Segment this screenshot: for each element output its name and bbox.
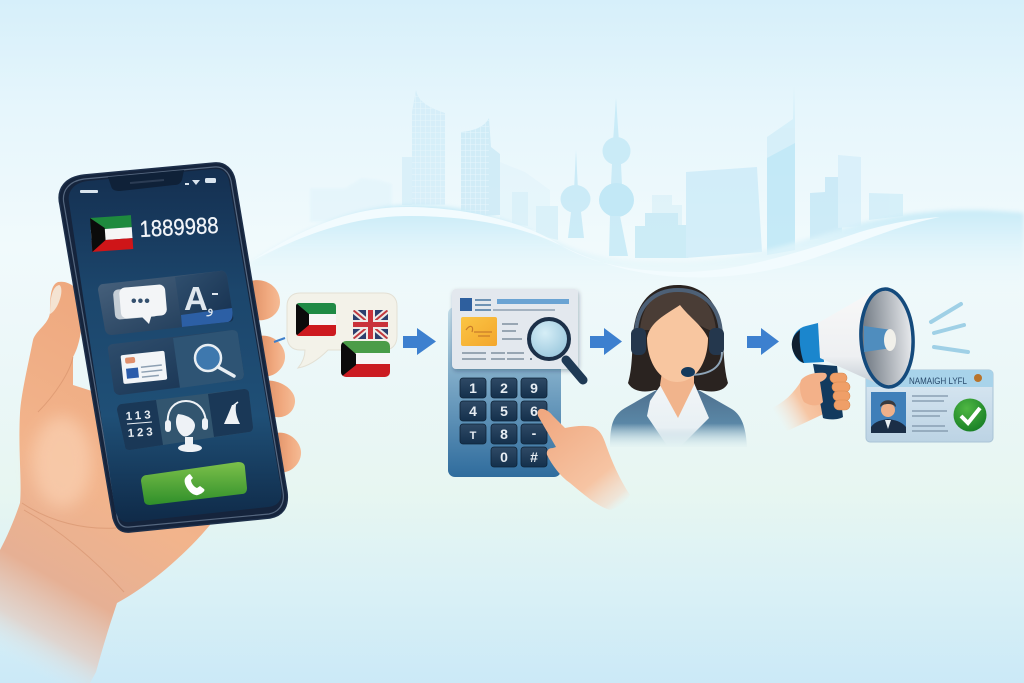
card heading: NAMAIGH LYFL <box>909 376 967 386</box>
skyline silhouette <box>310 87 903 258</box>
keypad keys: 6 <box>530 403 538 419</box>
flag: United Kingdom <box>353 310 388 339</box>
headset <box>636 290 721 335</box>
flag: Kuwait <box>296 303 336 336</box>
rim <box>858 288 916 388</box>
phone tile row 2 <box>108 330 244 395</box>
kuwait towers <box>560 98 634 256</box>
arrow 2 <box>590 328 622 355</box>
flag: Kuwait large <box>341 341 390 377</box>
phone tile row 3: 113 <box>125 409 151 423</box>
phone number: 1889988 <box>139 212 219 242</box>
mic stand icon <box>224 405 240 424</box>
keypad keys <box>460 378 547 467</box>
keypad keys: 4 <box>469 403 477 419</box>
keypad keys: 2 <box>500 380 508 396</box>
phone tile row 1 <box>98 271 233 335</box>
ID document card <box>452 289 578 369</box>
keypad keys: # <box>530 449 538 465</box>
magnifying glass <box>529 319 583 380</box>
keypad keys: 1 <box>469 380 477 396</box>
phone tile row 1: A <box>184 280 208 317</box>
Kuwait flag on phone <box>90 215 133 252</box>
arrow 1 <box>403 328 436 355</box>
hand creases <box>22 357 124 592</box>
thenar pad highlight <box>32 416 92 508</box>
keypad keys: T <box>470 430 477 442</box>
ID photo <box>871 392 906 433</box>
keypad keys: 0 <box>500 449 508 465</box>
palm and wrist <box>0 282 210 683</box>
thumbnail <box>50 285 61 314</box>
handle <box>813 364 843 419</box>
white cone <box>818 292 878 384</box>
call center agent <box>610 285 747 447</box>
arrow 3 <box>747 328 779 355</box>
keypad keys: - <box>532 425 537 441</box>
headset agent icon <box>168 401 206 425</box>
palm and thumb <box>800 373 827 405</box>
hair <box>628 285 728 392</box>
hand holding phone <box>0 280 301 683</box>
notch <box>108 170 184 191</box>
keypad keys: 8 <box>500 426 508 442</box>
fingers behind phone <box>248 280 301 472</box>
status icons <box>80 178 216 193</box>
keypad keys: 9 <box>530 380 538 396</box>
forearm <box>772 372 832 433</box>
pressing hand <box>538 409 630 510</box>
phone <box>59 163 287 532</box>
green check badge <box>954 398 986 432</box>
neck and face <box>660 372 694 418</box>
phone tile row 1: و <box>206 300 214 317</box>
gripping fingers <box>830 373 850 410</box>
keypad and ID document <box>448 289 630 510</box>
phone tile row 3 <box>117 389 253 452</box>
keypad keys: 5 <box>500 403 508 419</box>
blue rear <box>792 322 824 363</box>
wave ribbon <box>250 205 1024 300</box>
phone tile row 3: 123 <box>127 426 153 440</box>
jacket <box>610 388 747 447</box>
green call button <box>141 462 247 505</box>
ID card with check <box>866 370 993 442</box>
phone tile row 1: ••• <box>131 293 151 310</box>
sound lines <box>931 304 968 352</box>
id card icon <box>121 351 167 384</box>
shirt <box>647 383 709 447</box>
magnifier icon <box>195 345 221 371</box>
megaphone <box>772 288 968 433</box>
speech bubble with flags <box>274 293 397 377</box>
